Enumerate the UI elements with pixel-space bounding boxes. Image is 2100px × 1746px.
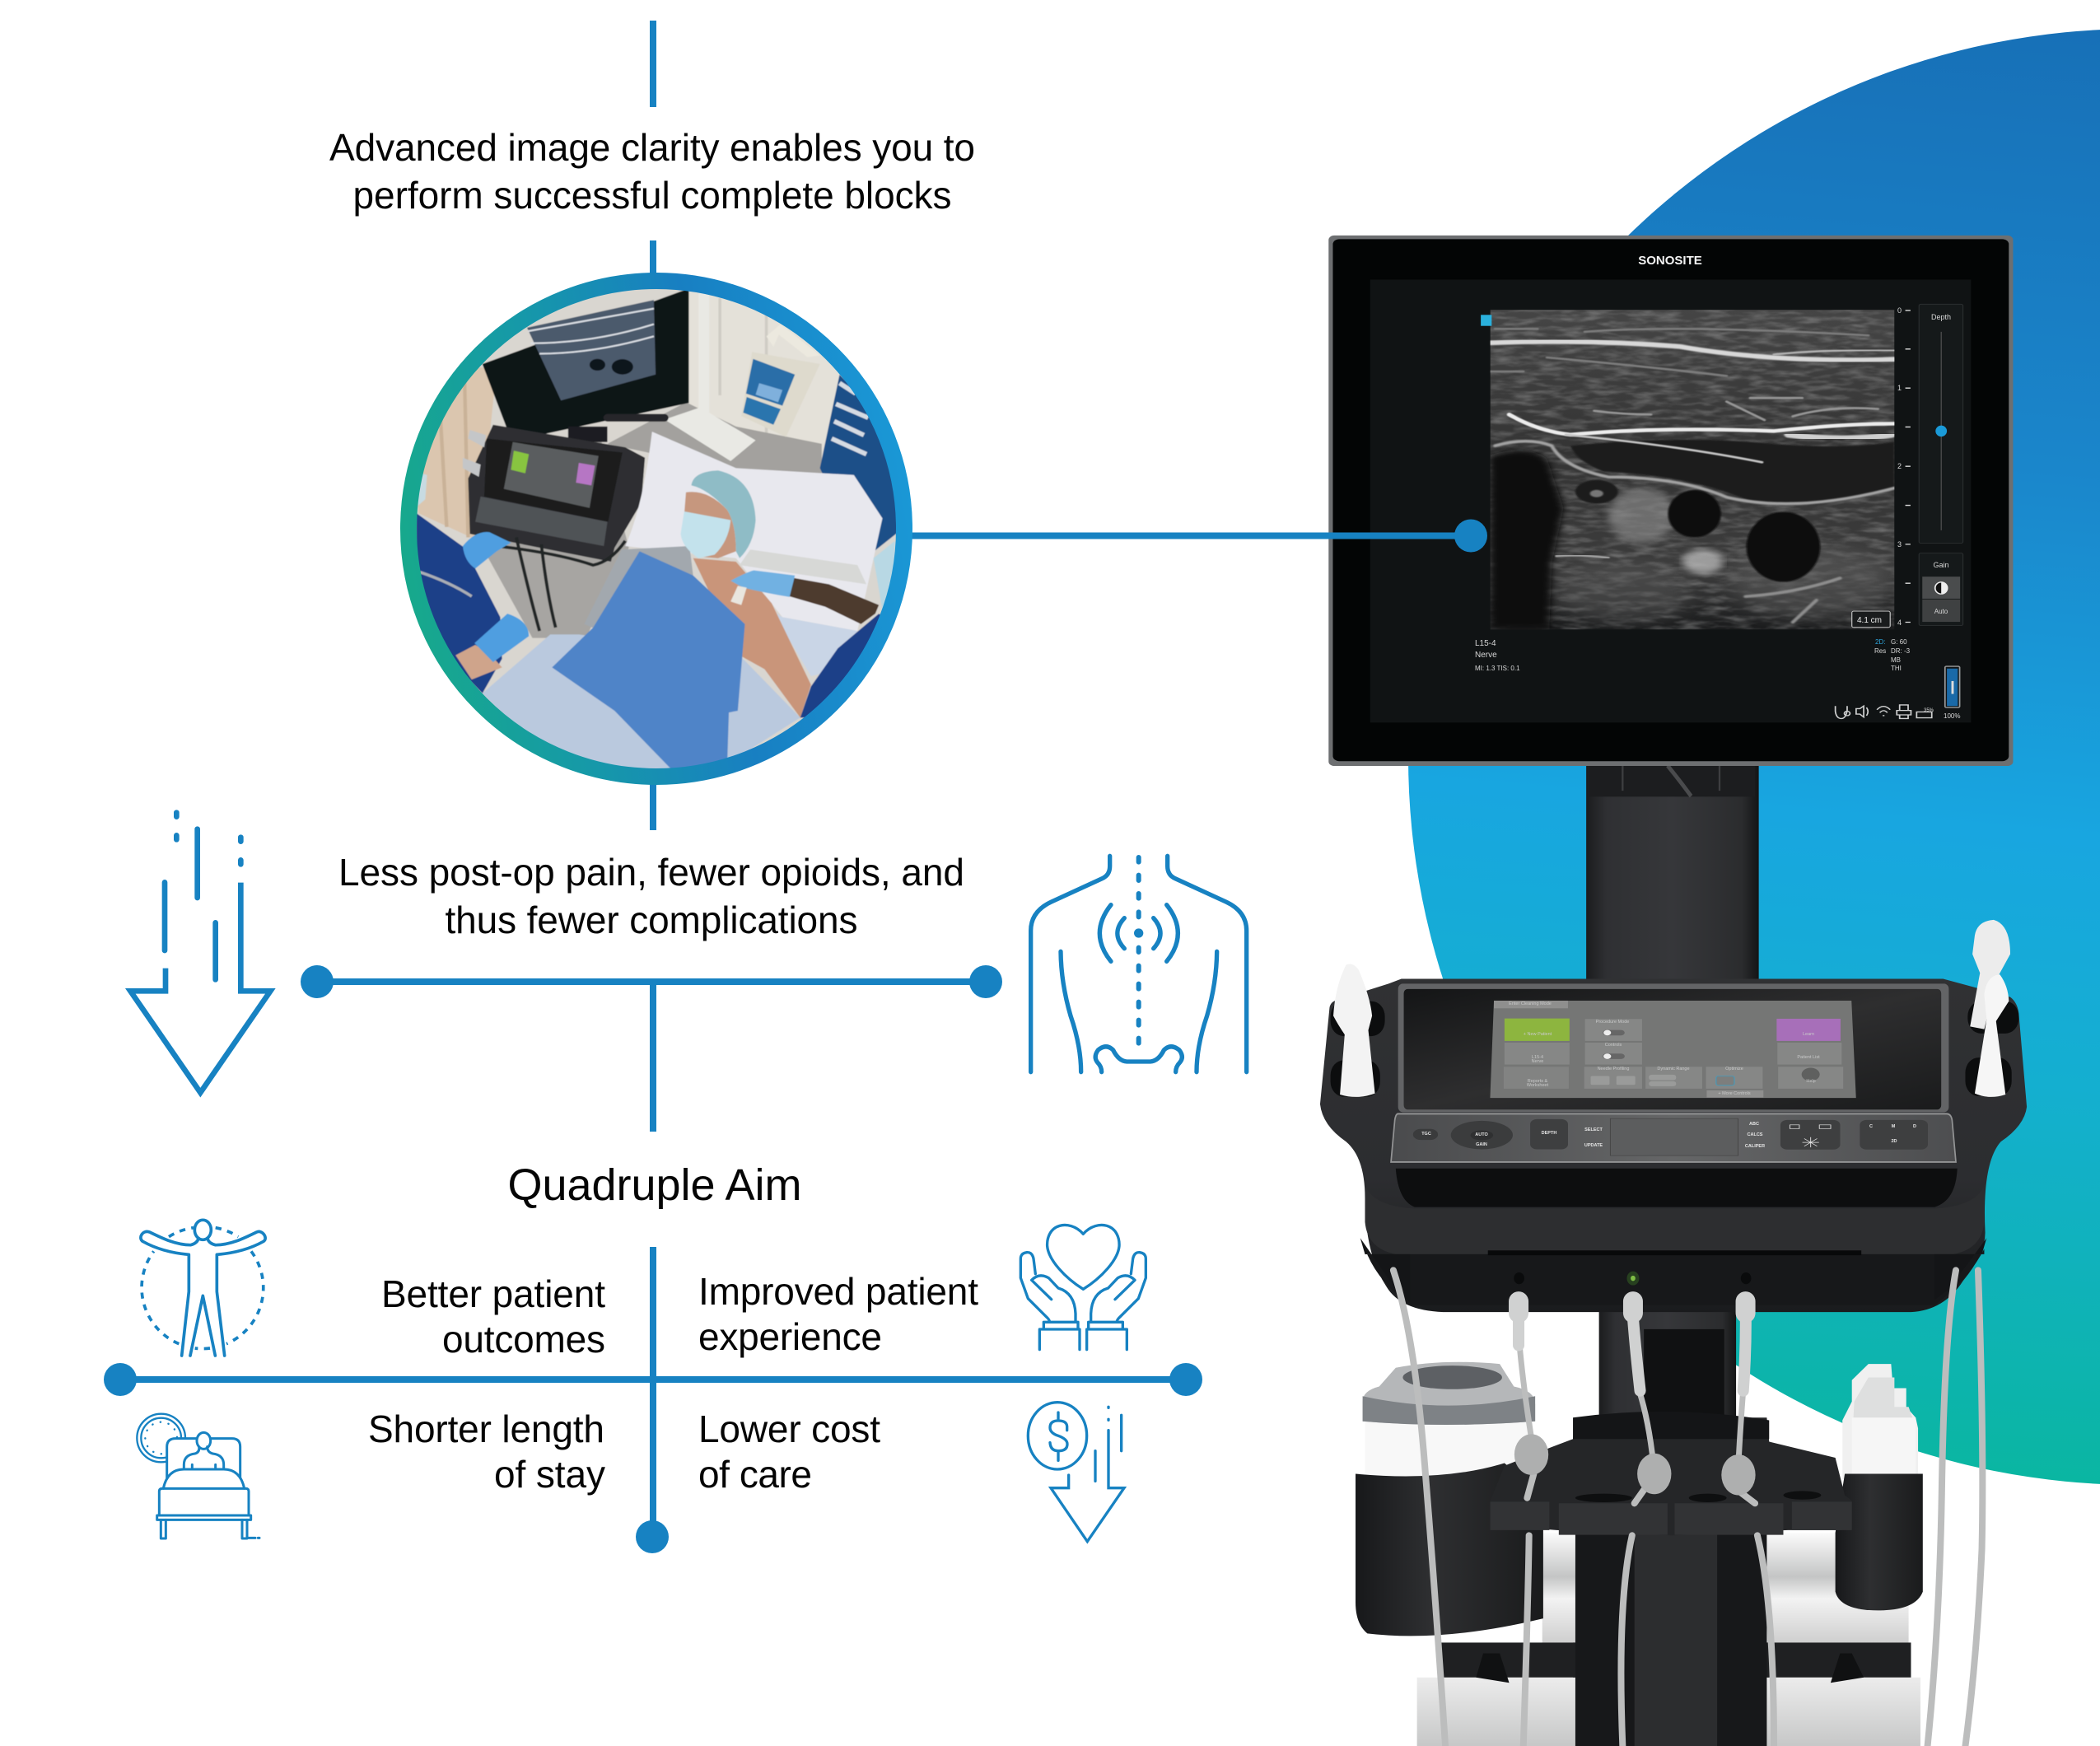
ui labels: + More Controls bbox=[1718, 1091, 1751, 1096]
lower housing bbox=[1365, 1249, 1984, 1305]
monitor readouts: 100% bbox=[1944, 712, 1960, 720]
line above photo bbox=[650, 240, 656, 278]
text: image clarity bbox=[329, 126, 975, 217]
monitor readouts: L15-4 bbox=[1475, 639, 1496, 648]
monitor readouts bbox=[1475, 306, 1960, 720]
sheet right of arm bbox=[777, 614, 857, 676]
monitor brand: SONOSITE bbox=[1638, 254, 1702, 268]
text: Lower cost of care: Lower cost bbox=[698, 1408, 880, 1450]
monitor readouts: 35% bbox=[1924, 708, 1934, 713]
text: Shorter length of stay: Shorter length bbox=[368, 1408, 604, 1450]
text: Shorter length of stay: of stay bbox=[494, 1453, 605, 1496]
ui labels: DEPTH bbox=[1542, 1131, 1556, 1136]
monitor glass bbox=[1332, 239, 2009, 761]
icon: falling arrow bbox=[130, 813, 270, 1093]
monitor readouts: 4 bbox=[1897, 619, 1902, 627]
supply cabinet bbox=[819, 374, 896, 550]
infusion pump bbox=[741, 335, 819, 436]
top vertical line bbox=[650, 21, 656, 107]
ui labels: Patient List bbox=[1797, 1055, 1820, 1060]
ui labels: 2D bbox=[1891, 1139, 1897, 1144]
ui labels: CALCS bbox=[1748, 1132, 1763, 1137]
battery icon bbox=[1945, 666, 1960, 707]
depth control bbox=[1919, 304, 1963, 544]
monitor readouts: DR: -3 bbox=[1891, 647, 1911, 655]
right hanging probes bbox=[1970, 920, 2010, 1097]
ui labels: Procedure Mode bbox=[1596, 1020, 1629, 1025]
ui labels: Needle Profiling bbox=[1598, 1067, 1629, 1071]
ui labels: M bbox=[1892, 1124, 1896, 1129]
monitor readouts: Depth bbox=[1931, 313, 1951, 321]
ui labels: AUTO bbox=[1475, 1132, 1488, 1137]
status icons bbox=[1836, 705, 1932, 718]
panel: ultrasound monitor bbox=[1328, 236, 2013, 766]
icon: heart in hands bbox=[1020, 1225, 1146, 1350]
ui labels: Learn bbox=[1803, 1032, 1814, 1037]
text: image clarity: perform successful complete blocks bbox=[352, 174, 952, 217]
ui labels: C bbox=[1869, 1124, 1873, 1129]
gown bbox=[584, 546, 693, 631]
panel: clinical photo bbox=[417, 289, 896, 768]
touchscreen display bbox=[1404, 989, 1941, 1109]
console handle and cables bbox=[497, 538, 625, 631]
photo console bbox=[463, 425, 645, 562]
text: Better patient outcomes: Better patient bbox=[381, 1272, 605, 1315]
left hanging probe bbox=[1333, 964, 1375, 1097]
background gradient circle bbox=[1408, 29, 2100, 1485]
monitor readouts: 1 bbox=[1897, 384, 1902, 392]
gain control bbox=[1919, 553, 1963, 626]
left clinician bbox=[417, 472, 529, 693]
ui labels: GAIN bbox=[1476, 1142, 1487, 1147]
monitor readouts: Nerve bbox=[1475, 651, 1497, 660]
patient head bbox=[680, 470, 756, 558]
ui labels: Nerve bbox=[1532, 1059, 1543, 1064]
icon: person in circle bbox=[141, 1220, 265, 1356]
timeline: pain connector bbox=[301, 965, 1002, 1132]
sheet bbox=[483, 634, 800, 773]
text: Improved patient experience: experience bbox=[698, 1315, 882, 1358]
ui tiles bbox=[1494, 1001, 1843, 1098]
text: Better patient outcomes bbox=[381, 1272, 605, 1361]
ui labels: Reports & bbox=[1528, 1079, 1548, 1084]
text: image clarity: Advanced image clarity enables you to bbox=[329, 126, 975, 169]
control panel bbox=[1391, 1113, 1956, 1162]
room background bbox=[417, 289, 896, 749]
touchscreen bezel bbox=[1398, 983, 1948, 1112]
ui labels: SELECT bbox=[1584, 1127, 1603, 1132]
monitor readouts: Res bbox=[1874, 647, 1886, 655]
probe tray bbox=[1491, 1412, 1852, 1535]
ui labels: UPDATE bbox=[1584, 1143, 1603, 1148]
physical controls bbox=[1413, 1118, 1928, 1155]
text: Lower cost of care bbox=[698, 1408, 880, 1496]
monitor readouts: 0 bbox=[1897, 306, 1902, 315]
text: Improved patient experience bbox=[698, 1270, 978, 1358]
touchscreen user interface bbox=[1413, 1001, 1928, 1155]
text: Better patient outcomes: outcomes bbox=[442, 1318, 605, 1361]
monitor readouts: Auto bbox=[1934, 608, 1948, 615]
monitor readouts: MB bbox=[1891, 656, 1901, 664]
quadrant axes bbox=[104, 1247, 1202, 1553]
patient body bbox=[693, 558, 811, 717]
door and floor bbox=[414, 284, 843, 638]
pillow bbox=[625, 432, 883, 631]
text: Improved patient experience: Improved patient bbox=[698, 1270, 978, 1313]
lower column bbox=[1573, 1310, 1769, 1746]
ultrasound image bbox=[1491, 310, 1894, 629]
icon: back with spine signal bbox=[1031, 856, 1247, 1072]
connector line to monitor bbox=[912, 519, 1487, 552]
ui labels: D bbox=[1913, 1124, 1916, 1129]
heading: Quadruple Aim: Quadruple Aim bbox=[507, 1160, 802, 1210]
base basket and shelf bbox=[1417, 1533, 1920, 1746]
right cup holder bbox=[1836, 1474, 1923, 1610]
monitor readouts: 4.1 cm bbox=[1857, 616, 1882, 625]
monitor readouts: MI: 1.3 TIS: 0.1 bbox=[1475, 665, 1520, 672]
monitor readouts: 3 bbox=[1897, 540, 1902, 549]
gel jar bbox=[1363, 1362, 1535, 1479]
monitor support neck bbox=[1586, 766, 1759, 980]
ui labels: Optimize bbox=[1725, 1067, 1743, 1071]
ui labels: CALIPER bbox=[1745, 1144, 1765, 1149]
ui labels: Help bbox=[1806, 1079, 1816, 1084]
monitor readouts: G: 60 bbox=[1891, 638, 1907, 646]
screen area bbox=[1370, 279, 1971, 722]
ui labels: Controls bbox=[1605, 1043, 1622, 1048]
text: pain: Less post-op pain, fewer opioids, and bbox=[338, 851, 964, 894]
speaker well bbox=[1396, 1169, 1958, 1207]
probe cables bbox=[1393, 1270, 1982, 1746]
line below photo bbox=[650, 782, 656, 830]
ui labels: Worksheet bbox=[1527, 1083, 1549, 1088]
monitor readouts: 2D: bbox=[1875, 638, 1885, 646]
ui labels: ABC bbox=[1749, 1122, 1759, 1127]
orientation marker bbox=[1481, 315, 1491, 326]
monitor frame bbox=[1328, 236, 2013, 766]
text: Lower cost of care: of care bbox=[698, 1453, 812, 1496]
text: pain: thus fewer complications bbox=[445, 899, 858, 941]
IV stand bbox=[665, 287, 756, 461]
monitor readouts: THI bbox=[1891, 665, 1902, 672]
blue drape bbox=[552, 551, 745, 770]
icon: patient bed and clock bbox=[137, 1414, 259, 1538]
depth readout box bbox=[1852, 611, 1890, 628]
connector ports bbox=[1514, 1272, 1751, 1286]
ui labels: Enter Cleaning Mode bbox=[1509, 1001, 1552, 1006]
left cup holder bbox=[1356, 1464, 1543, 1636]
text: pain bbox=[338, 851, 964, 941]
right clinician bbox=[730, 541, 897, 717]
monitor readouts: 2 bbox=[1897, 462, 1902, 470]
ui panel background bbox=[1490, 1001, 1856, 1098]
monitor readouts: Gain bbox=[1933, 561, 1949, 569]
photo ring bbox=[408, 281, 904, 777]
ui labels: + New Patient bbox=[1524, 1032, 1552, 1037]
head unit body bbox=[1320, 978, 2027, 1312]
front lip bbox=[1365, 1184, 1984, 1254]
ui labels: Dynamic Range bbox=[1657, 1067, 1690, 1071]
panel: ultrasound cart bbox=[1320, 766, 2027, 1746]
text: Shorter length of stay bbox=[368, 1408, 605, 1496]
ui labels: TGC bbox=[1421, 1132, 1431, 1137]
side probe holders bbox=[1331, 1001, 2018, 1097]
photo monitor bbox=[483, 288, 688, 442]
ui labels bbox=[1421, 1001, 1916, 1149]
gel bottle bbox=[1842, 1364, 1918, 1479]
depth scale ticks bbox=[1906, 310, 1911, 623]
ui labels: L15-4 bbox=[1532, 1055, 1543, 1060]
icon: lower cost bbox=[1028, 1403, 1124, 1542]
